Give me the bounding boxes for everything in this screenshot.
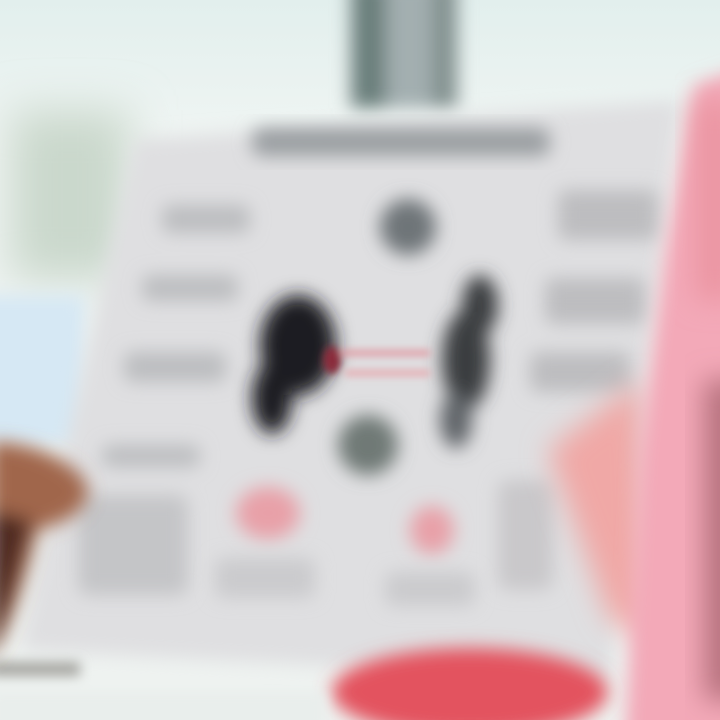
lower text blocks bbox=[215, 558, 475, 606]
right text blocks bbox=[498, 190, 658, 590]
top post bbox=[350, 0, 458, 108]
lower red icons bbox=[236, 487, 454, 554]
pink side page bbox=[548, 70, 720, 720]
finger bbox=[0, 442, 88, 660]
card title bbox=[252, 128, 550, 156]
right dark silhouette bbox=[440, 275, 498, 448]
top circle icon bbox=[380, 199, 436, 255]
left text blocks bbox=[78, 205, 250, 595]
red bottom shape bbox=[332, 648, 608, 720]
red connector bbox=[323, 346, 430, 376]
card bbox=[20, 100, 680, 680]
bottom ledge bbox=[0, 662, 325, 720]
bottom circle icon bbox=[338, 415, 398, 475]
left dark silhouette bbox=[252, 295, 336, 434]
